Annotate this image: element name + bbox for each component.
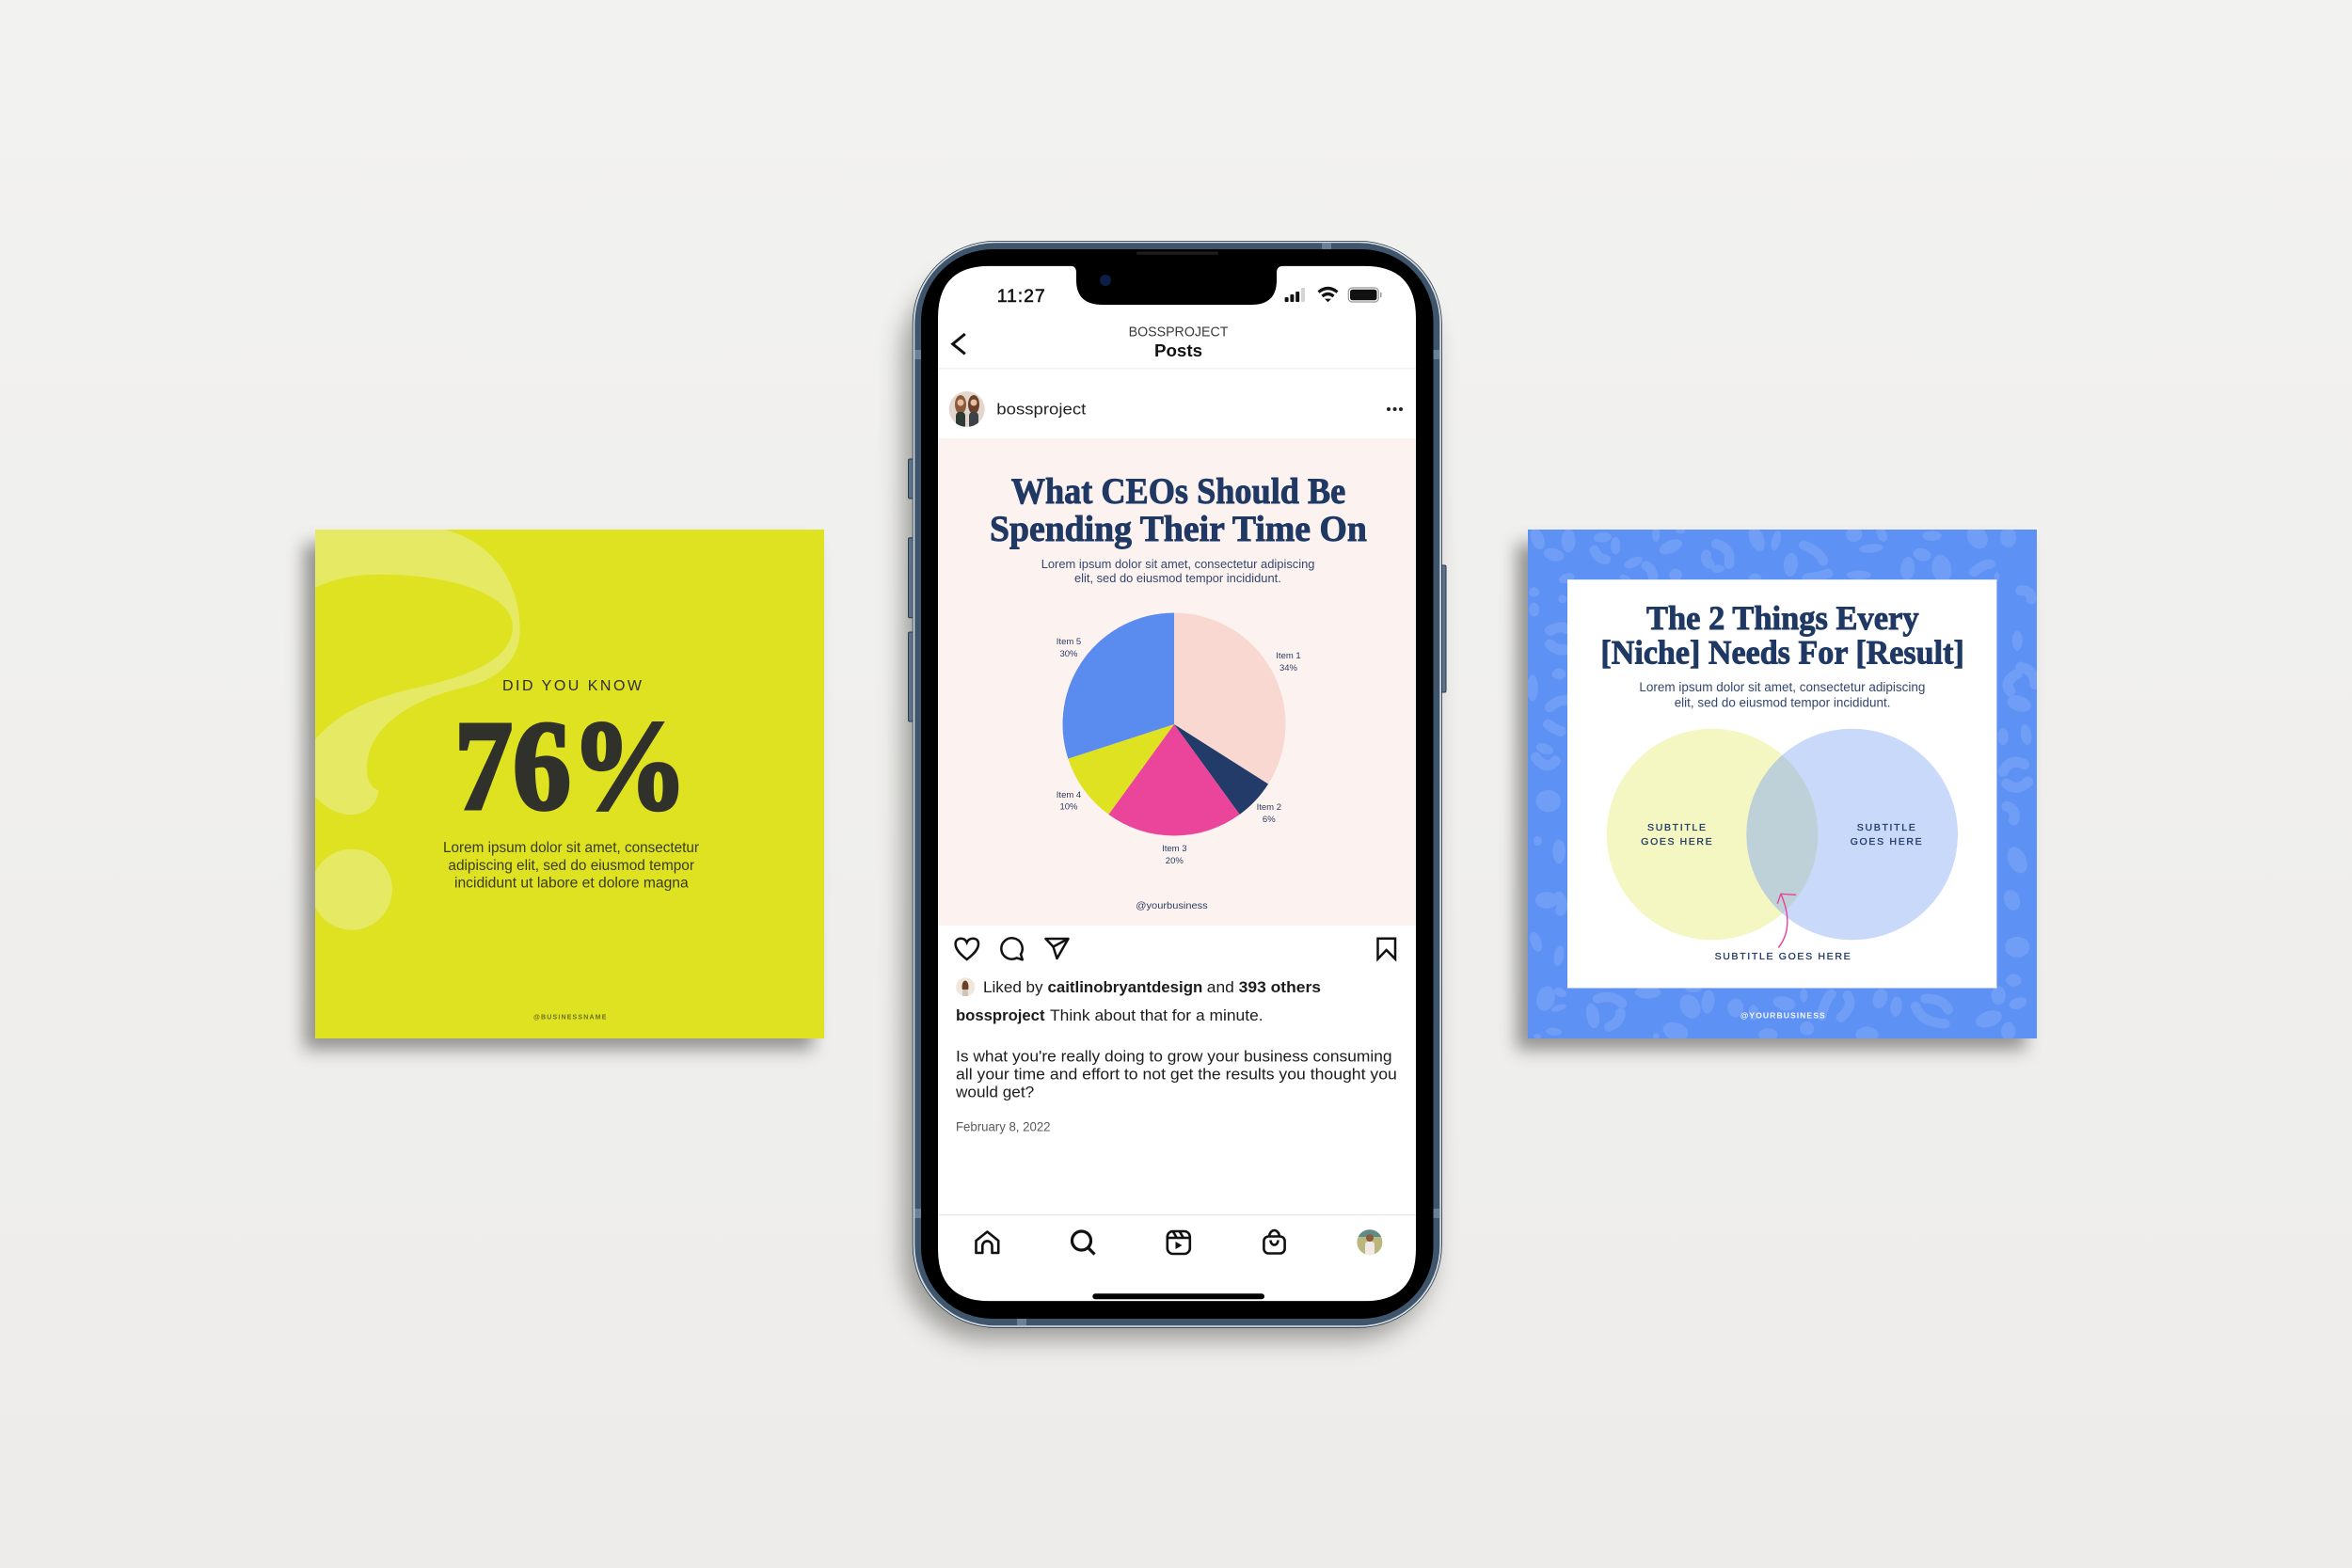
post heading: Spending Their Time On [990,509,1367,549]
slice: item 1 34% [1174,613,1285,784]
venn subtext [1639,680,1925,710]
icon: back chevron [953,334,965,354]
phone shadow [903,273,1432,1339]
venn right label [1851,822,1922,847]
nav title: Posts [1154,341,1202,360]
slice: item 2 6% [1174,724,1268,815]
pie chart [1063,613,1285,835]
tab bar divider [938,1214,1416,1215]
venn left label: GOES HERE [1641,836,1712,847]
venn heading [1600,599,1964,671]
username: bossproject [996,401,1087,419]
caption: Is what you're really doing to grow your business consuming [956,1048,1392,1065]
date: February 8, 2022 [956,1118,1051,1133]
pie labels: Item 3 [1162,844,1187,854]
venn right label: SUBTITLE [1857,822,1915,833]
handle: @BUSINESSNAME [533,1014,607,1021]
home indicator [1092,1293,1264,1299]
blob pattern [1527,522,2035,1044]
avatar: liked by [956,977,976,997]
card shadow: did you know [304,544,813,1050]
speaker [1136,252,1218,255]
icon: shop bag [1263,1230,1285,1253]
caption: bossproject [956,1007,1045,1024]
icon: send [1046,939,1069,958]
panel: venn diagram card [1527,522,2037,1044]
phone [909,241,1446,1328]
icon: reels [1168,1231,1190,1254]
nav divider [938,368,1416,369]
icon: comment [1001,938,1023,959]
post image background [938,438,1416,926]
post heading [990,471,1367,549]
post handle: @yourbusiness [1136,900,1208,911]
icon: search [1073,1231,1095,1255]
venn heading: The 2 Things Every [1646,599,1919,637]
avatar: bossproject [948,391,986,429]
pie labels: 20% [1166,856,1184,866]
liked by text: 393 others [1239,979,1321,996]
caption: Think about that for a minute. [1050,1007,1263,1024]
phone frame [913,241,1442,1328]
pie labels: 10% [1059,802,1078,813]
avatar: profile [1357,1229,1383,1257]
venn bottom label: SUBTITLE GOES HERE [1715,951,1851,962]
venn left label [1641,822,1712,847]
liked by text: and [1207,979,1234,996]
caption: would get? [955,1085,1034,1101]
liked by text: Liked by [983,979,1043,996]
slice: item 3 20% [1108,724,1240,835]
pie labels: Item 1 [1276,651,1301,661]
icon: battery [1348,288,1381,302]
venn left circle [1607,729,1818,940]
venn overlap [1746,755,1818,913]
body text: Lorem ipsum dolor sit amet, consectetur [443,840,699,856]
pie labels: Item 4 [1057,790,1081,800]
icon: wifi [1319,288,1338,302]
slice: item 4 10% [1068,724,1174,815]
post subtext: Lorem ipsum dolor sit amet, consectetur adipiscing [1041,557,1315,571]
post subtext [1041,557,1315,585]
arrow: pink pointer [1777,894,1796,948]
pie labels: 30% [1059,649,1078,659]
post heading: What CEOs Should Be [1011,471,1345,512]
screen [938,266,1416,1301]
body text [443,840,699,891]
side buttons [909,459,1446,721]
pie labels: Item 2 [1257,802,1281,813]
status time: 11:27 [997,286,1045,307]
slice: item 5 30% [1063,613,1174,759]
panel: did you know card [311,530,824,1038]
liked by text [983,979,1321,996]
icon: heart [956,939,978,959]
venn subtext: Lorem ipsum dolor sit amet, consectetur adipiscing [1639,680,1925,694]
pie labels: 34% [1279,663,1298,673]
venn left label: SUBTITLE [1647,822,1706,833]
card shadow: venn diagram [1517,544,2026,1050]
venn heading: [Niche] Needs For [Result] [1600,633,1964,671]
icon: home [977,1232,998,1253]
decorative question mark [311,530,520,930]
post subtext: elit, sed do eiusmod tempor incididunt. [1074,571,1281,585]
venn right label: GOES HERE [1851,836,1922,847]
venn subtext: elit, sed do eiusmod tempor incididunt. [1675,696,1891,710]
camera [1100,275,1111,286]
icon: signal [1285,288,1305,302]
pie labels: 6% [1263,815,1276,825]
icon: more dots [1387,407,1403,411]
label: did you know: DID YOU KNOW [502,678,643,694]
liked by text: caitlinobryantdesign [1048,979,1202,996]
icon: bookmark [1377,939,1395,959]
body text: incididunt ut labore et dolore magna [454,875,689,891]
handle: @YOURBUSINESS [1740,1011,1825,1021]
caption: all your time and effort to not get the results you thought you [956,1067,1397,1084]
pie labels: Item 5 [1057,637,1081,647]
big number 76%: 76% [454,696,688,837]
venn right circle [1746,729,1958,940]
nav account name: BOSSPROJECT [1129,325,1228,341]
body text: adipiscing elit, sed do eiusmod tempor [448,858,694,874]
caption [955,1007,1397,1101]
pie labels [1057,637,1301,866]
white content panel [1567,579,1996,988]
